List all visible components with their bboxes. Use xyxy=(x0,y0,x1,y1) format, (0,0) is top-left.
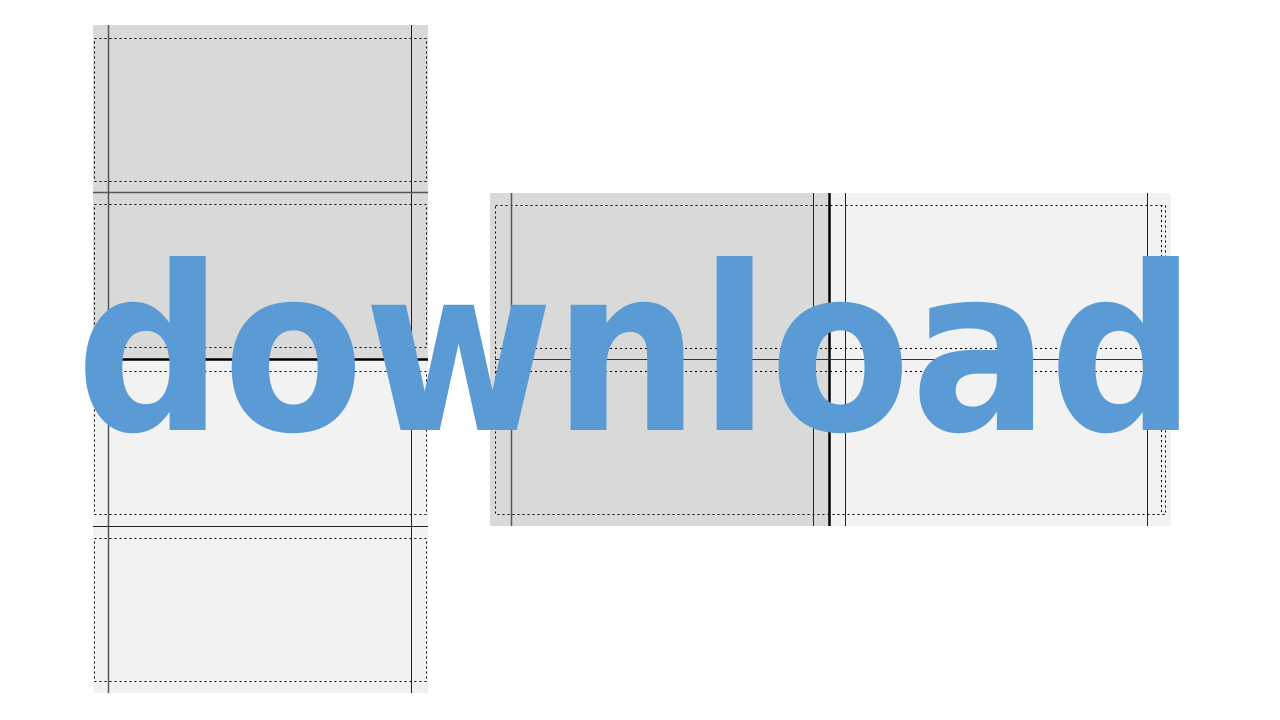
panel: right block xyxy=(490,193,1171,526)
panel: left column xyxy=(93,25,428,693)
